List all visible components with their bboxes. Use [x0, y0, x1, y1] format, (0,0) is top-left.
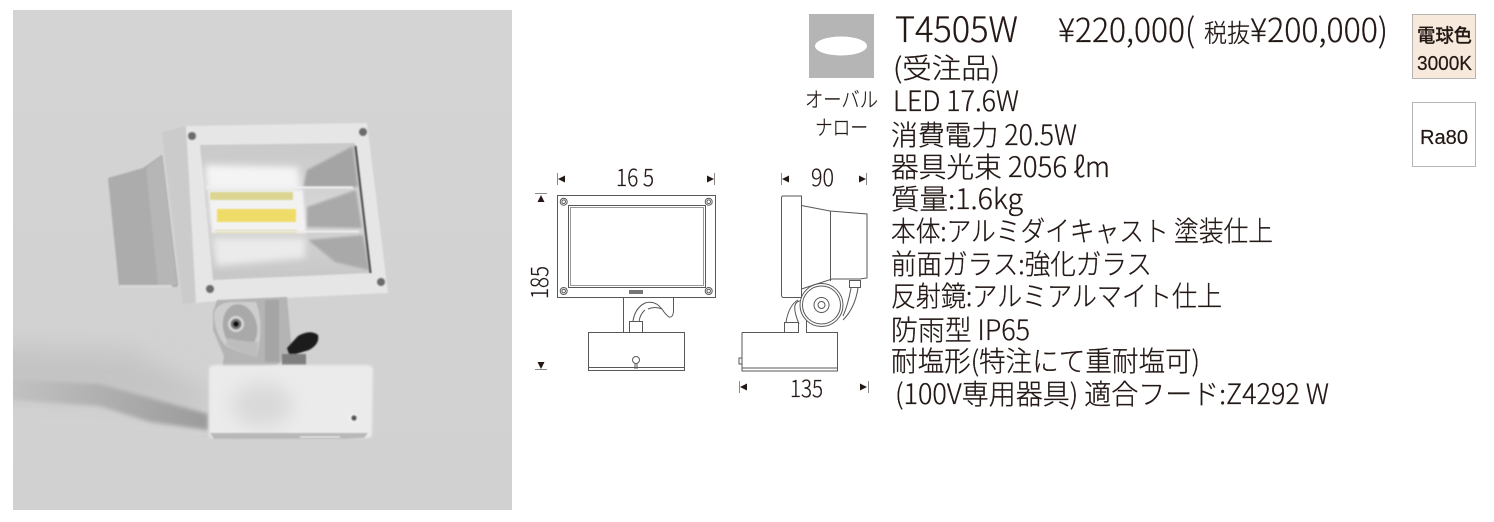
- panel: product photo: [0, 10, 512, 510]
- badge: colour temperature: 3000K: [1417, 53, 1473, 75]
- specification text: LED 17.6W: [893, 80, 1019, 120]
- icon: screws: [188, 128, 385, 293]
- icon: black knob: [282, 332, 318, 365]
- beam label: オーバル: [805, 84, 878, 114]
- reflector bars: [206, 186, 359, 232]
- floor shadow: [0, 345, 210, 430]
- specification text: 反射鏡:アルミアルマイト仕上: [891, 275, 1222, 315]
- icon: lamp front frame: [186, 123, 388, 303]
- specification text: (受注品): [893, 47, 1000, 87]
- dimension: 135 base: [740, 370, 868, 404]
- dimension: 90 depth: 90: [811, 159, 834, 193]
- specification text: [891, 47, 1329, 413]
- model and price: ¥220,000(: [1058, 4, 1195, 52]
- model and price: 税抜: [1204, 14, 1250, 50]
- dimension: 135 base: 135: [790, 370, 823, 404]
- dimension: 165 width: [558, 159, 714, 193]
- specification text: 器具光束 2056 ℓm: [891, 146, 1110, 186]
- badge: colour temperature: [1412, 14, 1476, 78]
- model and price: [895, 2, 1388, 53]
- model and price: ¥200,000): [1250, 4, 1388, 52]
- specification text: 前面ガラス:強化ガラス: [891, 243, 1152, 283]
- dimension: 90 depth: [782, 159, 866, 193]
- model and price: T4505W: [895, 2, 1018, 53]
- dimension: 185 height: [521, 194, 555, 370]
- specification text: 本体:アルミダイキャスト 塗装仕上: [891, 210, 1273, 250]
- dimension: 185 height: 185: [521, 266, 555, 299]
- badge: colour temperature: 電球色: [1417, 25, 1472, 47]
- icon: reflector glass: [200, 143, 371, 280]
- icon: LED strips: [210, 192, 297, 233]
- drawing: side view: [739, 196, 867, 371]
- badge: colour rendering: Ra80: [1420, 127, 1468, 149]
- specification text: 防雨型 IP65: [891, 309, 1030, 349]
- icon: oval beam pattern: [809, 14, 874, 78]
- icon: rear housing: [108, 155, 178, 287]
- dimension: 165 width: 16 5: [616, 159, 654, 193]
- beam label: [805, 84, 878, 142]
- specification text: 消費電力 20.5W: [891, 114, 1077, 154]
- specification text: (100V専用器具) 適合フード:Z4292 W: [895, 373, 1329, 413]
- icon: lamp side face: [164, 128, 187, 176]
- specification text: 耐塩形(特注にて重耐塩可): [891, 340, 1200, 380]
- beam label: ナロー: [815, 112, 868, 142]
- icon: bracket: [213, 297, 292, 370]
- icon: round base: [209, 365, 373, 439]
- badge: colour rendering: [1412, 102, 1476, 166]
- specification text: 質量:1.6kg: [891, 178, 1023, 218]
- drawing: front view: [558, 196, 716, 370]
